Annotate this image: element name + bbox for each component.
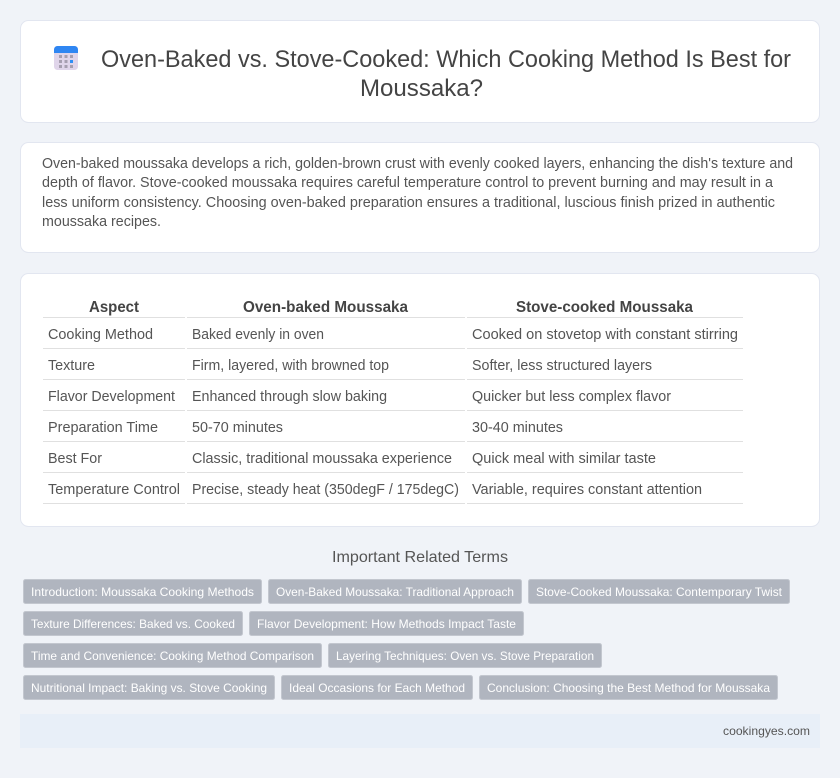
tag: Nutritional Impact: Baking vs. Stove Cooking xyxy=(31,681,267,695)
text block: summary paragraph xyxy=(42,156,793,230)
table header xyxy=(43,299,743,318)
related term tags xyxy=(24,580,790,700)
row: best for: Best For xyxy=(48,451,102,467)
row: flavor development: Enhanced through slow baking xyxy=(192,389,387,405)
tag xyxy=(24,612,242,636)
row: preparation time xyxy=(43,420,743,442)
row: preparation time: 30-40 minutes xyxy=(472,420,563,436)
tag: Conclusion: Choosing the Best Method for Moussaka xyxy=(487,681,770,695)
tag xyxy=(528,580,790,604)
row: texture: Texture xyxy=(48,358,95,374)
row: flavor development xyxy=(43,389,743,410)
table header: Oven-baked Moussaka xyxy=(243,299,408,316)
tag: Time and Convenience: Cooking Method Comparison xyxy=(31,649,314,663)
tag xyxy=(480,676,778,700)
row: texture xyxy=(43,358,743,380)
row: best for: Quick meal with similar taste xyxy=(472,451,656,467)
row: temperature control: Precise, steady heat (350degF / 175degC) xyxy=(192,482,459,498)
row: texture: Firm, layered, with browned top xyxy=(192,358,389,374)
row: best for: Classic, traditional moussaka experience xyxy=(192,451,452,467)
row: preparation time: 50-70 minutes xyxy=(192,420,283,436)
row: flavor development: Quicker but less complex flavor xyxy=(472,389,671,405)
row: cooking method: Cooked on stovetop with constant stirring xyxy=(472,327,738,343)
tag: Layering Techniques: Oven vs. Stove Preparation xyxy=(336,649,594,663)
text block: summary paragraph: moussaka recipes. xyxy=(42,214,161,230)
tag xyxy=(24,676,274,700)
row: preparation time: Preparation Time xyxy=(48,420,158,436)
icon: calendar xyxy=(54,46,78,70)
row: best for xyxy=(43,451,743,472)
table header: Stove-cooked Moussaka xyxy=(516,299,693,316)
tag: Flavor Development: How Methods Impact Taste xyxy=(257,617,516,631)
row: cooking method: Baked evenly in oven xyxy=(192,327,324,343)
row: temperature control: Temperature Control xyxy=(48,482,180,498)
tag: Oven-Baked Moussaka: Traditional Approach xyxy=(276,585,514,599)
tag xyxy=(282,676,472,700)
text block: summary paragraph: Oven-baked moussaka develops a rich, golden-brown crust with evenly cooked layers, enhancing the dish's texture and xyxy=(42,156,793,172)
footer: cookingyes.com xyxy=(723,724,810,738)
row: temperature control xyxy=(43,482,743,504)
title: Moussaka? xyxy=(360,75,483,102)
row: cooking method xyxy=(43,327,743,348)
tag xyxy=(24,644,322,668)
tag xyxy=(328,644,602,668)
tag: Introduction: Moussaka Cooking Methods xyxy=(31,585,254,599)
row: texture: Softer, less structured layers xyxy=(472,358,652,374)
panel: summary xyxy=(20,142,820,252)
text block: summary paragraph: depth of flavor. Stove-cooked moussaka requires careful temperature control to prevent burning and may result in a xyxy=(42,175,773,191)
tag: Texture Differences: Baked vs. Cooked xyxy=(31,617,235,631)
text block: summary paragraph: less uniform consistency. Choosing oven-baked preparation ensures a traditional, luscious finish prized in authentic xyxy=(42,195,775,211)
title xyxy=(101,46,791,102)
tag xyxy=(268,580,522,604)
panel: title card xyxy=(20,20,820,122)
tag: Ideal Occasions for Each Method xyxy=(289,681,465,695)
table header: Aspect xyxy=(89,299,140,316)
tag: Stove-Cooked Moussaka: Contemporary Twist xyxy=(536,585,783,599)
row: cooking method: Cooking Method xyxy=(48,327,153,343)
row: temperature control: Variable, requires constant attention xyxy=(472,482,702,498)
tag xyxy=(250,612,524,636)
panel: comparison table xyxy=(20,274,820,526)
heading: important related terms: Important Related Terms xyxy=(332,549,508,566)
row: flavor development: Flavor Development xyxy=(48,389,175,405)
footer xyxy=(20,714,820,748)
tag xyxy=(24,580,262,604)
title: Oven-Baked vs. Stove-Cooked: Which Cooking Method Is Best for xyxy=(101,46,791,73)
